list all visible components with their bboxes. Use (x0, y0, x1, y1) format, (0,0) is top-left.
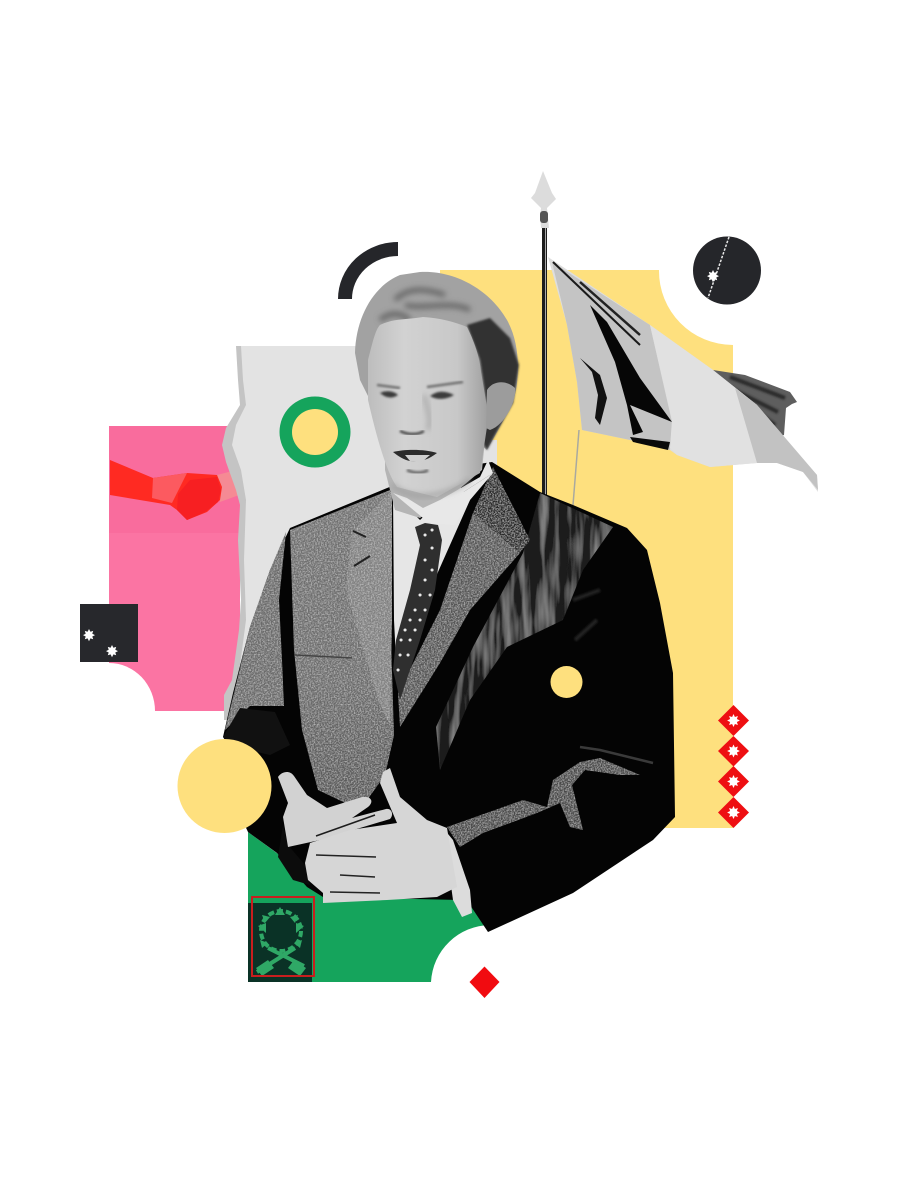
icon: dark circle with star (693, 236, 761, 304)
right upper lapel (473, 467, 530, 553)
panel: yellow background (440, 270, 733, 828)
star (707, 270, 719, 282)
head (355, 272, 519, 525)
cuff (443, 828, 472, 917)
suit jacket (223, 462, 675, 932)
left thumb and fingers (278, 772, 392, 847)
nose (400, 431, 424, 434)
left sleeve (225, 532, 286, 730)
hair (355, 272, 518, 450)
sleeve fold (447, 758, 640, 847)
wreath tips (256, 907, 306, 976)
eyebrows (377, 382, 463, 388)
panel: pink torn paper (109, 426, 240, 711)
flag: main cloth (548, 257, 818, 492)
circle: large yellow (178, 739, 272, 833)
image: flagpole (531, 171, 579, 505)
diamond (718, 766, 749, 797)
jacket front (290, 490, 394, 810)
diamond (718, 797, 749, 828)
icon: green ring (280, 396, 350, 468)
icon: dark arc (345, 249, 398, 299)
yellow dot on jacket (550, 666, 582, 698)
collar tip (423, 473, 493, 525)
lapel notch (353, 531, 370, 566)
left sleeve dark cuff (278, 825, 310, 885)
left sleeve shadow (223, 708, 290, 755)
right lapel (398, 513, 520, 727)
band: handshake photo tint (109, 426, 240, 533)
pocket line (295, 655, 352, 658)
wreath emblem (257, 911, 304, 972)
chest with vertical streaks (436, 493, 613, 770)
eyes (380, 391, 454, 399)
flag: right band (735, 388, 818, 490)
hands (278, 768, 472, 917)
panel: grey torn paper (222, 346, 497, 720)
tie (393, 523, 442, 700)
hair dark side (467, 318, 519, 450)
collar (393, 460, 493, 518)
face (368, 317, 487, 497)
icon: red diamond (470, 966, 500, 998)
flag: black folds (590, 305, 672, 435)
person (223, 272, 675, 932)
shirt (393, 484, 470, 680)
badge frame (252, 897, 314, 976)
mouth (393, 450, 437, 461)
ear (486, 382, 515, 430)
icon: red diamond stack (718, 705, 749, 828)
image: red handshake (110, 460, 242, 520)
stars (727, 714, 740, 819)
icon: dark square with stars (80, 604, 138, 662)
image: waving flag (548, 257, 818, 492)
star (83, 629, 95, 641)
hair curls (380, 290, 470, 320)
diamond (718, 705, 749, 736)
panel: green block (248, 832, 490, 982)
diamond (718, 736, 749, 766)
neck (385, 430, 486, 518)
star (106, 645, 118, 657)
flag: far dark stripe (713, 370, 797, 438)
right hand (305, 768, 457, 903)
badge: dark emblem (248, 897, 314, 982)
flag: light centre band (650, 325, 757, 467)
flag: shaded left band (552, 262, 672, 450)
left lapel (346, 490, 392, 725)
